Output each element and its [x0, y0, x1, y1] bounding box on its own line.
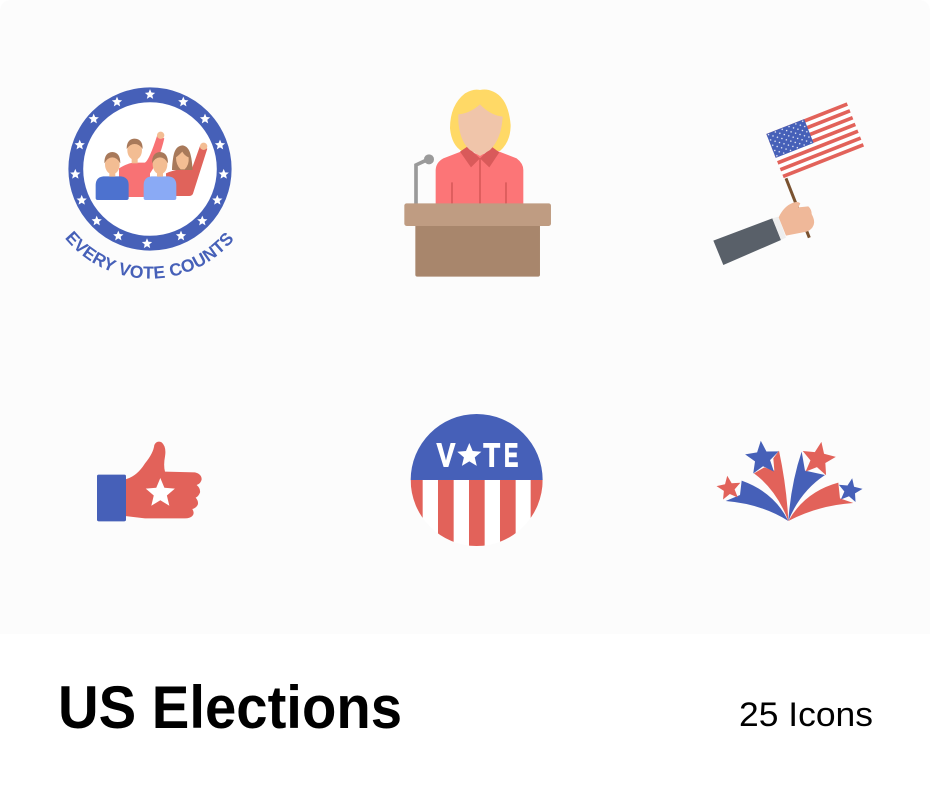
sleeve and hand [713, 218, 781, 265]
podium [415, 223, 540, 277]
icon: every vote counts badge [65, 87, 233, 279]
group of voters [96, 132, 207, 200]
icon: vote button [410, 414, 543, 546]
badge stars [70, 89, 229, 248]
vote lettering [437, 437, 518, 474]
icon: fireworks stars [715, 439, 864, 521]
icon: hand waving american flag [713, 102, 864, 265]
vote lettering: V [437, 437, 455, 474]
title: US Elections [58, 674, 402, 741]
icon count: 25 Icons [739, 696, 873, 734]
icon: candidate at podium [404, 89, 551, 277]
flag [766, 102, 864, 178]
microphone [416, 160, 427, 204]
vote lettering: E [504, 437, 518, 474]
icon: thumbs up [97, 442, 202, 521]
vote lettering: T [483, 437, 500, 474]
curved slogan: EVERY VOTE COUNTS [65, 230, 233, 279]
